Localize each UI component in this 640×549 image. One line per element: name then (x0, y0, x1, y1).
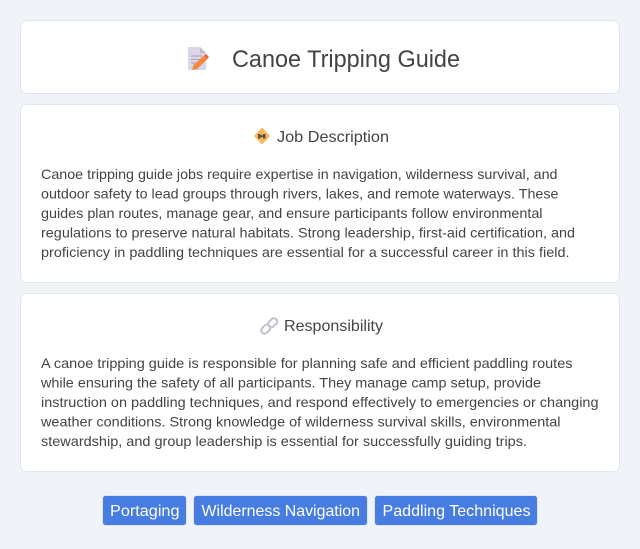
job description text (41, 166, 575, 260)
job description text: proficiency in paddling techniques are essential for a successful career in this field. (41, 244, 570, 260)
icon: document with pencil (188, 47, 209, 70)
job description text: regulations to preserve natural habitats. Strong leadership, first-aid certification, and (41, 224, 575, 240)
tag: portaging (102, 496, 186, 526)
heading: responsibility: Responsibility (284, 318, 383, 335)
responsibility text: while ensuring the safety of all participants. They manage camp setup, provide (40, 374, 541, 390)
heading: job description: Job Description (277, 129, 389, 146)
responsibility text: weather conditions. Strong knowledge of wilderness survival skills, environmental (40, 414, 561, 430)
tag: paddling techniques: Paddling Techniques (382, 503, 530, 520)
tag: paddling techniques (374, 496, 538, 526)
responsibility text: stewardship, and group leadership is essential for successfully guiding trips. (41, 433, 527, 449)
tag: portaging: Portaging (110, 503, 180, 520)
title: Canoe Tripping Guide (232, 46, 460, 73)
responsibility text: instruction on paddling techniques, and respond effectively to emergencies or changing (41, 394, 598, 410)
job description text: guides plan routes, manage gear, and ensure participants follow environmental (41, 205, 542, 221)
responsibility text: A canoe tripping guide is responsible for planning safe and efficient paddling routes (41, 355, 572, 371)
panel: job description (20, 104, 620, 282)
responsibility text (40, 355, 599, 449)
tag: wilderness navigation (194, 496, 368, 526)
panel: title card (20, 20, 620, 94)
icon: chain link (260, 317, 279, 335)
tag: wilderness navigation: Wilderness Navigation (202, 503, 360, 520)
job description text: outdoor safety to lead groups through rivers, lakes, and remote waterways. These (41, 186, 559, 202)
icon: diamond road sign (254, 128, 270, 144)
job description text: Canoe tripping guide jobs require expertise in navigation, wilderness survival, and (41, 166, 558, 182)
panel: responsibility (20, 294, 620, 472)
